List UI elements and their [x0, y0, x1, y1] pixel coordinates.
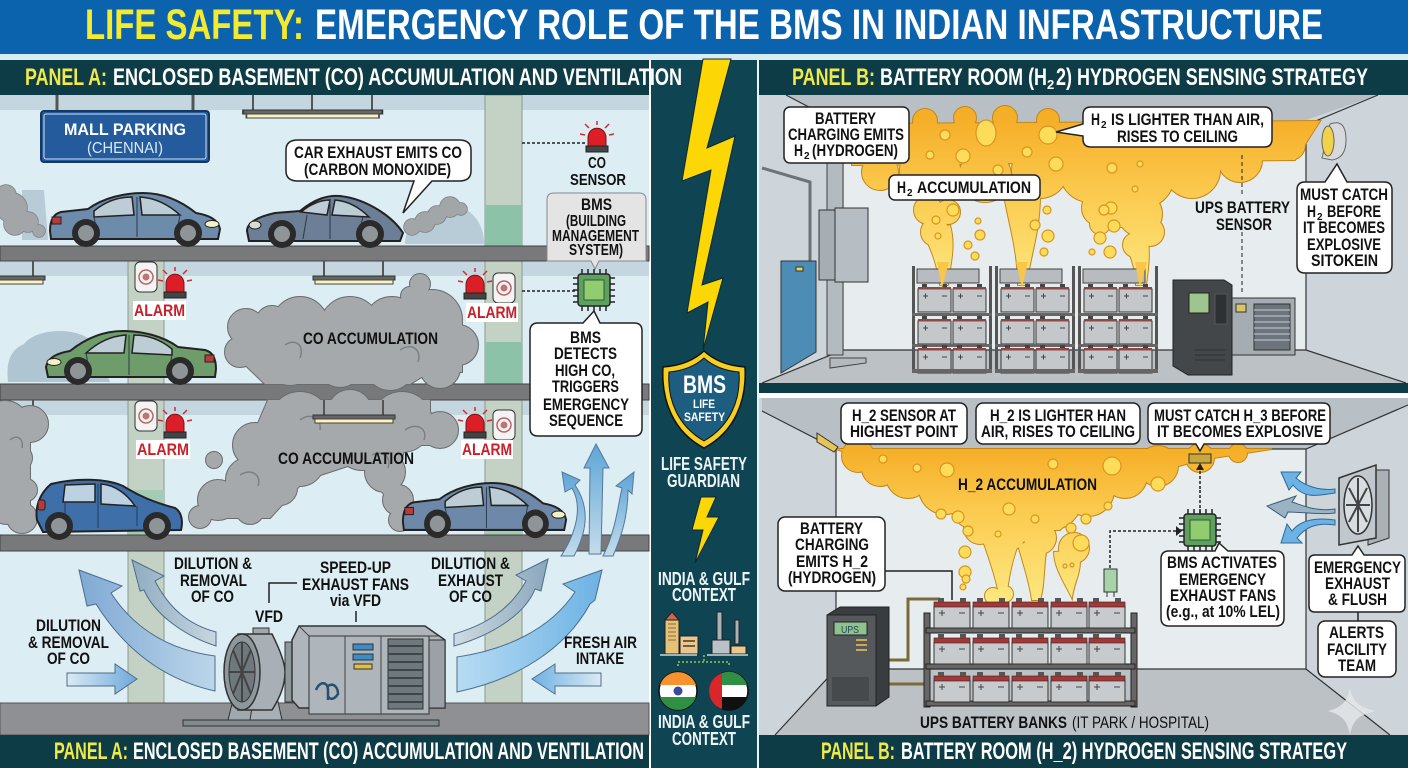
label: UPS battery banks: UPS BATTERY BANKS [920, 713, 1067, 732]
callout: must catch H2: IT BECOMES [1303, 218, 1385, 237]
lightning bolt [682, 59, 735, 350]
callout: H2 sensor at highest point: HIGHEST POINT [850, 422, 959, 441]
band between right panels [759, 383, 1408, 393]
callout: must catch H2 [1297, 164, 1392, 273]
car exhaust callout [286, 140, 471, 213]
india and gulf context label [658, 569, 750, 605]
label: CO accumulation 1: CO ACCUMULATION [303, 329, 438, 348]
BMS chip and sensor link [1104, 509, 1221, 597]
label: H2 accumulation: H_2 ACCUMULATION [958, 475, 1097, 494]
callout: BMS detects: DETECTS [554, 344, 617, 363]
CO sensor: CO [588, 155, 606, 172]
callout: must catch H2: EXPLOSIVE [1307, 235, 1381, 254]
panel B upper: battery room [759, 95, 1408, 383]
icon: small lightning bolt [692, 497, 719, 563]
car exhaust callout: CAR EXHAUST EMITS CO [294, 143, 462, 162]
car: grey coupe [247, 196, 403, 248]
callout: H2 sensor at highest point [841, 403, 967, 444]
callout: BMS activates exhaust: BMS ACTIVATES [1167, 553, 1277, 572]
panel B upper header: BATTERY ROOM (H [880, 64, 1047, 91]
label: fresh air intake [564, 633, 637, 668]
label: UPS battery sensor [1195, 155, 1291, 293]
callout: H2 lighter than air: 2 [1101, 120, 1107, 131]
panel A footer [0, 735, 649, 768]
icon: hydrogen sensor on wall [1322, 123, 1346, 160]
BMS box: BMS [581, 195, 612, 214]
BMS box: SYSTEM) [569, 242, 623, 259]
icon: uae flag [709, 672, 748, 710]
icon: ceiling sensors [817, 433, 1211, 513]
callout: BMS detects: HIGH CO, [555, 361, 615, 380]
callout: BMS detects: SEQUENCE [549, 411, 623, 430]
exhaust fan unit [183, 626, 445, 726]
BMS chip [522, 269, 615, 311]
callout: emergency exhaust & flush: EXHAUST [1325, 574, 1390, 593]
UPS unit [827, 599, 940, 706]
label: VFD [255, 583, 297, 626]
callout: BMS activates exhaust: (e.g., at 10% LEL) [1166, 602, 1280, 621]
callout: H2 lighter than air: RISES TO CEILING [1117, 127, 1238, 146]
label: dilution & removal center-left: REMOVAL [180, 571, 247, 590]
CO sensor [522, 121, 626, 189]
icon: sparkle watermark [1328, 688, 1376, 735]
callout: battery charging emits H2: (HYDROGEN) [812, 141, 898, 160]
shield: BMS life safety: LIFE [693, 397, 715, 411]
car: green sedan row 2 [8, 331, 216, 385]
structural columns [128, 95, 522, 703]
callout: H2 accumulation: H [897, 178, 906, 197]
label: dilution & exhaust [431, 554, 510, 606]
callout: H2 lighter than air: H [1091, 110, 1100, 129]
callout: H2 lighter than air: IS LIGHTER THAN AIR, [1111, 110, 1264, 129]
arrow: left intake [67, 664, 137, 694]
callout: battery charging emits H2 [784, 107, 909, 163]
label: fresh air intake: FRESH AIR [564, 633, 637, 652]
CO sensor: SENSOR [570, 172, 626, 189]
callout: BMS activates exhaust: EXHAUST FANS [1170, 586, 1276, 605]
panel B upper header: 2 [1047, 77, 1054, 92]
sign: mall parking [41, 95, 209, 162]
callout: alerts facility team: TEAM [1338, 656, 1376, 675]
callout: H2 lighter than air lower: H_2 IS LIGHTER HAN [990, 406, 1126, 425]
callout: BMS activates exhaust [1161, 543, 1284, 626]
arrow: fresh air intake [532, 664, 601, 694]
label: speed-up exhaust fans [302, 558, 409, 622]
callout: must catch H3 [1148, 403, 1330, 451]
hydrogen cloud upper [852, 106, 1320, 285]
label: dilution & exhaust: EXHAUST [438, 571, 503, 590]
callout: BMS activates exhaust: EMERGENCY [1179, 570, 1267, 589]
smoke and cars row 1 [0, 185, 484, 248]
panel A header [0, 60, 682, 95]
icon: india flag [659, 672, 697, 710]
panel A: enclosed basement [0, 95, 649, 735]
label: dilution & removal left: DILUTION [36, 616, 101, 635]
center column [651, 59, 757, 768]
callout: alerts facility team: FACILITY [1327, 640, 1388, 659]
panel B lower: hydrogen sensing [759, 398, 1408, 735]
callout: must catch H2: H [1307, 202, 1316, 221]
shield: BMS life safety: SAFETY [684, 410, 725, 424]
icon: city skyline and industry [660, 612, 748, 666]
callout: must catch H3: MUST CATCH H_3 BEFORE [1154, 406, 1326, 425]
shield: BMS life safety: BMS [683, 371, 726, 399]
smoke: CO accumulation row 2 and 3 [0, 274, 478, 533]
label: dilution & exhaust: OF CO [449, 587, 492, 606]
india and gulf context label lower: INDIA & GULF [658, 712, 750, 732]
battery charging callout lower: EMITS H_2 [796, 552, 868, 571]
label: dilution & removal left: & REMOVAL [28, 633, 109, 652]
label: dilution & removal center-left: OF CO [191, 587, 234, 606]
car: blue hatchback row 3 [37, 480, 182, 540]
UPS unit: UPS [841, 625, 859, 636]
label: fresh air intake: INTAKE [576, 649, 624, 668]
panel B upper header [757, 60, 1408, 95]
label: UPS battery banks [920, 713, 1209, 732]
white separator frame [757, 60, 759, 768]
car: grey sedan row 3 [403, 483, 566, 538]
panel B lower footer [759, 735, 1408, 768]
title: LIFE SAFETY: [85, 1, 304, 49]
arrow: dilution right large [457, 570, 602, 692]
label: dilution & removal left [28, 616, 109, 668]
arrow: dilution right small [454, 559, 548, 646]
label: dilution & removal center-left [174, 554, 252, 606]
label: speed-up exhaust fans: via VFD [330, 591, 381, 610]
india and gulf context label: INDIA & GULF [658, 569, 750, 589]
title banner [0, 0, 1408, 60]
callout: H2 accumulation [889, 175, 1040, 200]
callout: alerts facility team [1318, 612, 1396, 677]
label: speed-up exhaust fans: EXHAUST FANS [302, 575, 409, 594]
car: blue sedan [50, 193, 220, 247]
sign: mall parking: (CHENNAI) [87, 140, 163, 157]
callout: alerts facility team: ALERTS [1329, 623, 1384, 642]
bubbles [926, 120, 1143, 260]
shield: BMS life safety [663, 351, 745, 448]
panel A header: ENCLOSED BASEMENT (CO) ACCUMULATION AND VENTILATION [113, 64, 682, 91]
panel A footer: ENCLOSED BASEMENT (CO) ACCUMULATION AND VENTILATION [133, 738, 644, 765]
india and gulf context label lower: CONTEXT [672, 729, 736, 749]
panel A footer: PANEL A: [54, 738, 128, 765]
callout: must catch H2: MUST CATCH [1300, 185, 1388, 204]
callout: BMS detects: BMS [570, 328, 601, 347]
floor slabs [0, 246, 649, 735]
callout: emergency exhaust & flush [1309, 546, 1405, 612]
callout: BMS detects [530, 311, 642, 436]
bubbles [879, 455, 1165, 590]
arrows: exhaust air flow [1267, 472, 1335, 543]
arrow: dilution left large [79, 570, 215, 691]
BMS box: (BUILDING [566, 213, 626, 230]
BMS box: MANAGEMENT [552, 228, 639, 245]
panel A header: PANEL A: [25, 64, 107, 91]
label: dilution & removal center-left: DILUTION & [174, 554, 252, 573]
room shell [759, 398, 1408, 735]
alarms row 3 right: ALARM [462, 440, 512, 459]
arrow: dilution left small [132, 560, 216, 646]
callout: H2 sensor at highest point: H_2 SENSOR AT [852, 406, 956, 425]
callout: battery charging emits H2: CHARGING EMITS [788, 125, 904, 144]
callout: must catch H2: SITOKEIN [1311, 251, 1378, 270]
label: UPS battery sensor: SENSOR [1216, 215, 1272, 234]
battery rack lower [924, 598, 1137, 707]
life safety guardian label: LIFE SAFETY [661, 454, 747, 474]
panel B upper header: PANEL B: [792, 64, 875, 91]
label: dilution & exhaust: DILUTION & [431, 554, 510, 573]
panel B lower footer: PANEL B: [821, 738, 895, 765]
label: CO accumulation 2: CO ACCUMULATION [278, 449, 414, 468]
car exhaust callout: (CARBON MONOXIDE) [304, 160, 451, 179]
callout: H2 lighter than air lower [976, 403, 1140, 444]
arrows: upward exhaust [561, 444, 634, 556]
callout: H2 accumulation: ACCUMULATION [917, 178, 1031, 197]
alarms row 3 left [135, 401, 192, 459]
electrical panel and cabinet [762, 155, 868, 373]
life safety guardian label: GUARDIAN [667, 471, 740, 491]
callout: H2 accumulation: 2 [907, 188, 913, 199]
callout: must catch H2: 2 [1317, 212, 1323, 223]
alarms row 2 right: ALARM [467, 303, 517, 322]
callout: H2 lighter than air lower: AIR, RISES TO CEILING [981, 422, 1135, 441]
callout: BMS detects: EMERGENCY [543, 395, 630, 414]
callout: H2 lighter than air [1056, 107, 1272, 147]
BMS box [547, 193, 646, 269]
label: speed-up exhaust fans: SPEED-UP [320, 558, 391, 577]
alarms row 3 left: ALARM [137, 440, 189, 459]
callout: must catch H3: IT BECOMES EXPLOSIVE [1157, 422, 1323, 441]
battery charging callout lower [778, 517, 952, 600]
alarms row 2 left: ALARM [134, 301, 185, 320]
life safety guardian label [661, 454, 747, 491]
callout: emergency exhaust & flush: & FLUSH [1328, 590, 1387, 609]
room shell [759, 95, 1408, 383]
callout: battery charging emits H2: H [794, 141, 803, 160]
battery charging callout lower: BATTERY [800, 519, 864, 538]
india and gulf context label lower [658, 712, 750, 749]
alarms row 2 right [458, 268, 518, 322]
callout: battery charging emits H2: BATTERY [815, 109, 877, 128]
callout: battery charging emits H2: 2 [804, 151, 810, 162]
sign: mall parking: MALL PARKING [64, 120, 186, 139]
label: VFD: VFD [255, 607, 283, 626]
battery charging callout lower: (HYDROGEN) [788, 568, 876, 587]
alarms row 2 left [133, 262, 192, 320]
label: UPS battery sensor: UPS BATTERY [1195, 198, 1291, 217]
alarms row 3 right [458, 407, 515, 459]
UPS cabinet and AC unit [1173, 280, 1295, 375]
india and gulf context label: CONTEXT [672, 585, 736, 605]
battery charging callout lower: CHARGING [795, 535, 869, 554]
callout: BMS detects: TRIGGERS [552, 377, 619, 396]
icon: exhaust fan [1339, 465, 1389, 545]
ceiling lights [0, 95, 395, 423]
label: UPS battery banks: (IT PARK / HOSPITAL) [1072, 713, 1209, 732]
callout: must catch H2: BEFORE [1327, 202, 1381, 221]
label: dilution & removal left: OF CO [47, 649, 90, 668]
hydrogen cloud lower [836, 440, 1272, 604]
racks: battery [912, 262, 1158, 373]
